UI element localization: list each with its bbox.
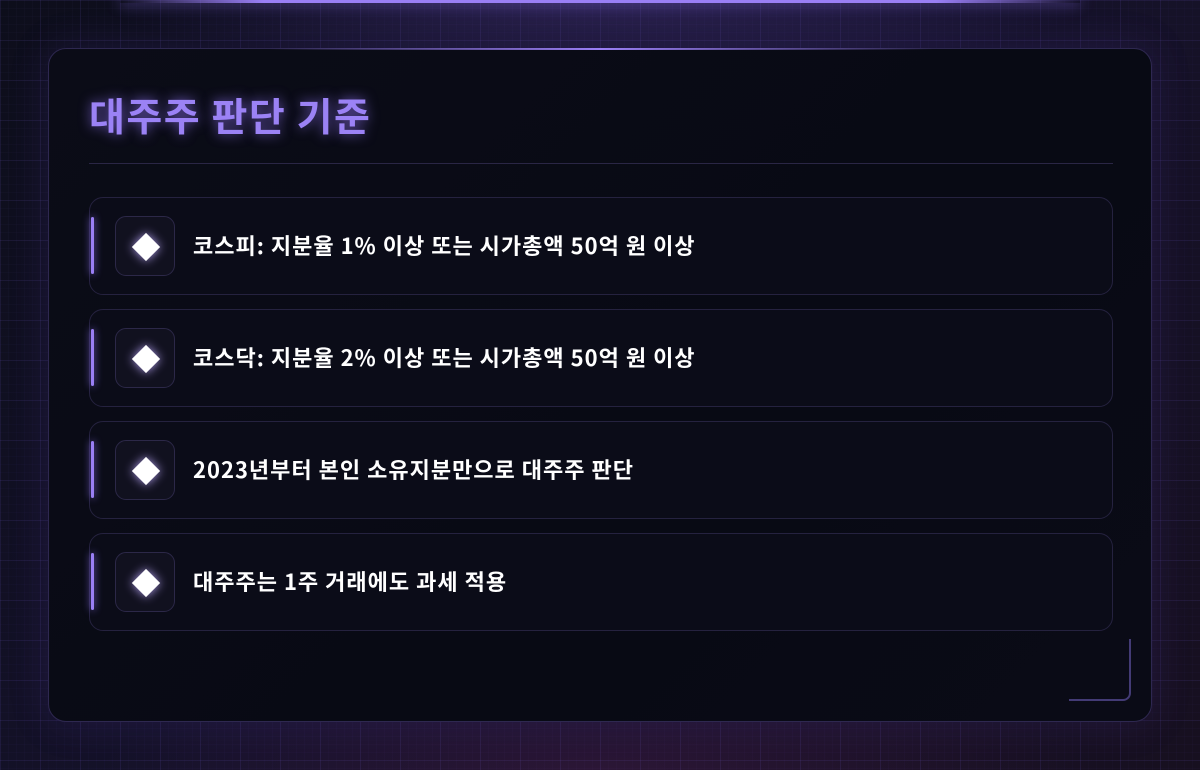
icon: diamond xyxy=(115,328,175,388)
icon: diamond xyxy=(115,216,175,276)
text: kosdaq: 코스닥: 지분율 2% 이상 또는 시가총액 50억 원 이상 xyxy=(193,341,696,373)
icon: diamond xyxy=(115,552,175,612)
item 2 xyxy=(89,309,1113,407)
text: 2023 rule: 2023년부터 본인 소유지분만으로 대주주 판단 xyxy=(193,453,634,485)
item 3 xyxy=(89,421,1113,519)
top glow line xyxy=(120,0,1080,3)
text: taxation: 대주주는 1주 거래에도 과세 적용 xyxy=(193,565,507,597)
text: kospi: 코스피: 지분율 1% 이상 또는 시가총액 50억 원 이상 xyxy=(193,229,696,261)
icon: diamond xyxy=(115,440,175,500)
title: 대주주 판단 기준 xyxy=(89,87,371,143)
item 1 xyxy=(89,197,1113,295)
corner bracket xyxy=(1069,639,1131,701)
item 4 xyxy=(89,533,1113,631)
